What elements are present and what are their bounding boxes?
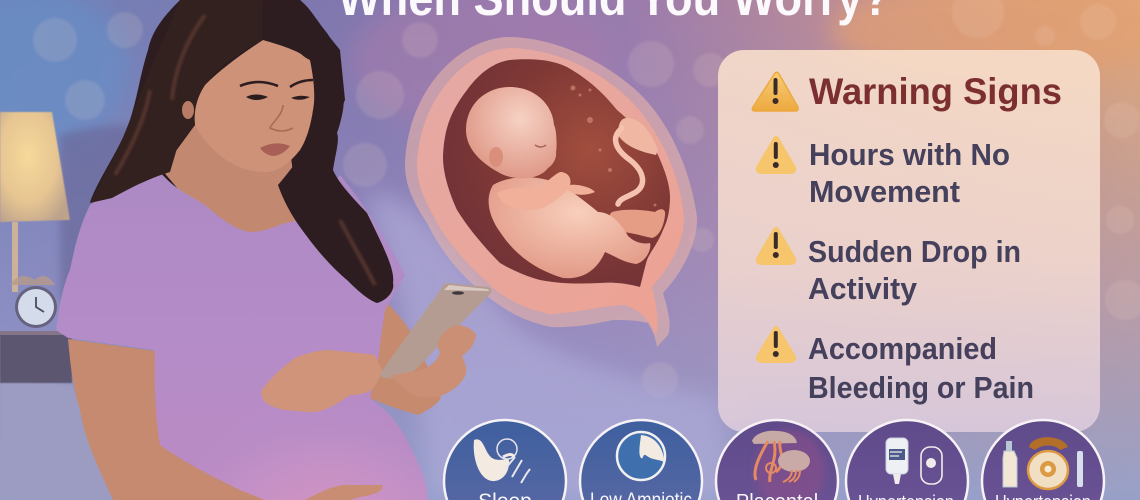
hair highlights xyxy=(115,15,375,285)
face features xyxy=(182,80,313,156)
fingers on phone xyxy=(390,325,476,397)
fetus xyxy=(466,87,665,278)
front hair right xyxy=(278,0,394,303)
heading: warning signs: Warning Signs xyxy=(809,71,1062,112)
panel: warning signs xyxy=(718,50,1100,432)
icon: low fluid circle xyxy=(617,432,665,480)
text: hours with no movement xyxy=(810,143,1009,202)
icon: iv bag and monitor xyxy=(886,438,942,484)
sleeping eye xyxy=(535,145,546,147)
belly xyxy=(242,454,428,500)
text: accompanied bleeding or pain: Accompanied xyxy=(808,331,997,366)
text: sudden drop in activity: Sudden Drop in xyxy=(808,234,1021,269)
badge: placental xyxy=(716,420,838,500)
badge: hypertension 1 xyxy=(846,420,968,500)
text: hours with no movement: Hours with No xyxy=(809,137,1010,172)
hand on belly xyxy=(261,350,382,412)
lower hand xyxy=(305,485,383,500)
placenta xyxy=(618,118,658,155)
text: accompanied bleeding or pain: Bleeding or Pain xyxy=(808,370,1034,405)
neck xyxy=(165,125,296,232)
smartphone xyxy=(380,283,492,380)
head xyxy=(466,87,557,178)
front hair left xyxy=(90,0,263,203)
shirt xyxy=(56,172,425,500)
far leg xyxy=(609,209,665,238)
arm xyxy=(497,172,595,210)
text: hours with no movement: Movement xyxy=(809,174,960,209)
left arm xyxy=(68,339,265,500)
text: accompanied bleeding or pain xyxy=(808,331,1034,405)
ear xyxy=(489,147,503,167)
badge: low amniotic xyxy=(580,420,702,500)
table lamp xyxy=(0,112,70,292)
bedroom: bed, headboard and nightstand xyxy=(0,125,730,500)
back hair xyxy=(90,0,345,202)
badge: sleep xyxy=(444,420,566,500)
icon: placenta xyxy=(752,431,810,482)
icon: warning triangle 1 xyxy=(759,139,793,171)
icon: warning triangle 2 xyxy=(759,230,793,262)
icon: warning triangle 3 xyxy=(759,329,793,360)
face xyxy=(195,40,314,172)
womb illustration xyxy=(405,37,697,347)
right arm xyxy=(370,298,441,415)
torso and near leg xyxy=(489,177,650,278)
text: sudden drop in activity: Activity xyxy=(808,271,918,306)
alarm clock xyxy=(10,276,57,328)
icon: sleeping figure xyxy=(474,439,530,483)
icon: bottle and gauge xyxy=(1003,437,1083,489)
umbilical cord xyxy=(616,128,643,204)
amniotic cavity xyxy=(443,59,670,287)
badge: hypertension 2 xyxy=(982,420,1104,500)
text: sudden drop in activity xyxy=(808,234,1021,306)
icon: warning triangle heading xyxy=(752,72,798,111)
woman xyxy=(56,0,492,500)
